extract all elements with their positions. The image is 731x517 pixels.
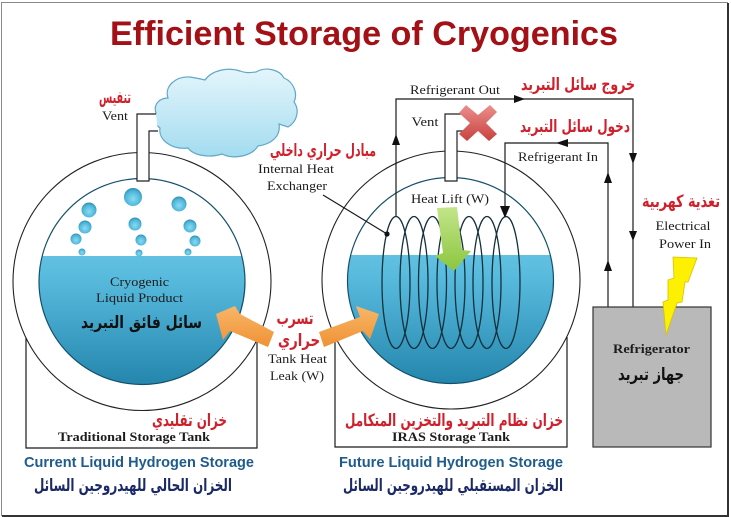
- labels: refrigerant out: [410, 75, 635, 97]
- labels: refrigerant in: [518, 117, 630, 164]
- inner vessel: [348, 178, 554, 384]
- refrigerator box: [593, 307, 711, 447]
- labels: internal heat exchanger: [258, 141, 376, 193]
- outer tank wall: [322, 151, 580, 409]
- refrigerant out line: [392, 95, 637, 307]
- label: right vent: Vent: [412, 114, 439, 129]
- labels: IRAS storage tank: خزان نظام التبريد والتخزين المتكامل: [345, 411, 563, 431]
- labels: IRAS storage tank: [345, 411, 563, 444]
- labels: electrical power: Power In: [659, 236, 712, 251]
- labels: cryogenic liquid: سائل فائق التبريد: [81, 313, 202, 333]
- labels: tank heat leak: Tank Heat: [268, 351, 327, 366]
- cryogenic liquid: [348, 255, 553, 383]
- labels: traditional storage tank: [58, 411, 227, 444]
- caption: current storage: [24, 454, 254, 496]
- tank support box: [335, 337, 567, 447]
- inner vessel outline: [39, 178, 245, 384]
- labels: refrigerant out: خروج سائل التبريد: [521, 75, 635, 95]
- caption: future storage: الخزان المستقبلي للهيدروجين السائل: [343, 476, 563, 496]
- label: heat lift: Heat Lift (W): [411, 191, 489, 206]
- caption: current storage: الخزان الحالي للهيدروجين السائل: [34, 476, 232, 496]
- labels: vent: [99, 88, 131, 123]
- labels: internal heat exchanger: Internal Heat: [258, 161, 334, 176]
- tank support box: [26, 337, 257, 448]
- labels: traditional storage tank: خزان تقليدي: [152, 411, 227, 431]
- caption: future storage: Future Liquid Hydrogen Storage: [339, 454, 563, 471]
- labels: IRAS storage tank: IRAS Storage Tank: [392, 429, 511, 444]
- labels: vent: Vent: [102, 108, 128, 123]
- labels: cryogenic liquid: Cryogenic: [110, 274, 169, 289]
- labels: tank heat leak: حراري: [278, 331, 320, 351]
- panel: traditional storage tank: [13, 69, 297, 448]
- refrigerant in line: [500, 139, 612, 307]
- labels: refrigerator: [613, 341, 690, 385]
- inner vessel: [39, 178, 245, 384]
- labels: electrical power: Electrical: [656, 218, 711, 233]
- vent pipe: [445, 114, 466, 181]
- vapour bubbles: [70, 188, 200, 256]
- blocked vent cross: [459, 105, 497, 141]
- labels: refrigerator: Refrigerator: [613, 341, 690, 356]
- arrow: left tank heat leak: [216, 306, 274, 347]
- heat exchanger coil: [382, 216, 520, 348]
- labels: refrigerant in: دخول سائل التبريد: [520, 117, 630, 137]
- labels: vent: تنفيس: [99, 88, 131, 108]
- labels: tank heat leak: Leak (W): [270, 368, 324, 383]
- icon: electrical lightning bolt: [663, 257, 697, 335]
- labels: refrigerator: جهاز تبريد: [618, 365, 684, 385]
- outer tank wall: [13, 152, 271, 410]
- internal heat exchanger leader: [323, 195, 390, 237]
- cryogenic liquid: [40, 256, 244, 384]
- labels: cryogenic liquid: [81, 274, 202, 333]
- labels: cryogenic liquid: Liquid Product: [96, 290, 183, 305]
- title: Efficient Storage of Cryogenics: [110, 15, 618, 53]
- labels: traditional storage tank: Traditional Storage Tank: [58, 429, 211, 444]
- vent pipe: [137, 114, 158, 181]
- labels: refrigerant in: Refrigerant In: [518, 149, 599, 164]
- panel: IRAS storage tank: [322, 105, 580, 447]
- labels: tank heat leak: تسرب: [276, 309, 314, 329]
- arrow: right tank heat leak: [319, 306, 379, 347]
- labels: refrigerant out: Refrigerant Out: [410, 82, 500, 97]
- arrow: heat lift: [435, 207, 471, 271]
- labels: internal heat exchanger: Exchanger: [267, 178, 328, 193]
- labels: tank heat leak: [268, 309, 327, 383]
- inner vessel outline: [348, 178, 554, 384]
- vent cloud: [155, 69, 297, 157]
- caption: current storage: Current Liquid Hydrogen Storage: [24, 454, 254, 471]
- caption: future storage: [339, 454, 563, 496]
- labels: electrical power: [642, 192, 720, 251]
- labels: internal heat exchanger: مبادل حراري داخلي: [270, 141, 376, 161]
